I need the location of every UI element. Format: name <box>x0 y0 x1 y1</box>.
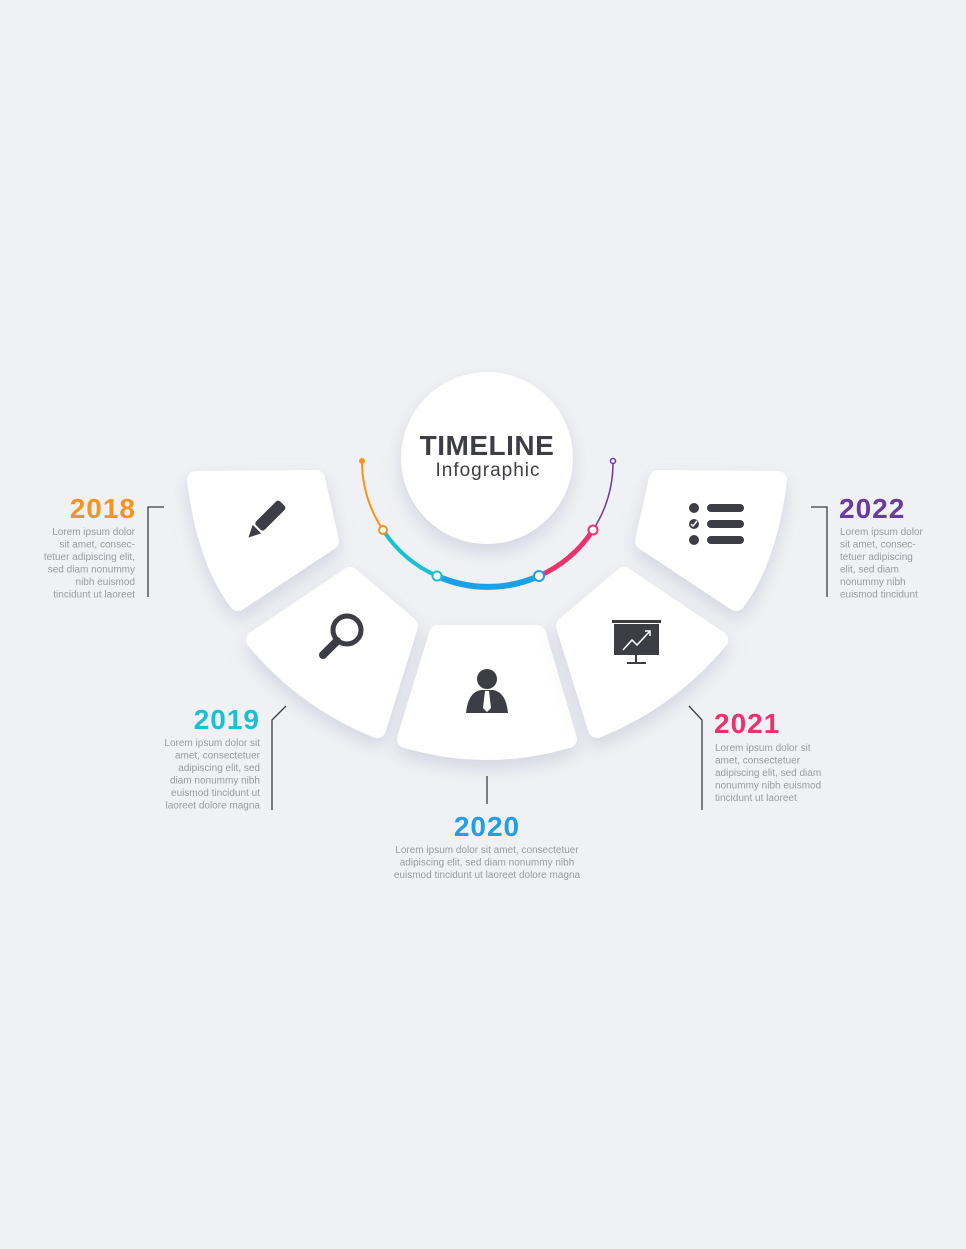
icon: person <box>466 669 508 713</box>
text: 2020: Lorem ipsum dolor sit amet, consectetuer <box>395 845 579 856</box>
icon: pencil <box>244 499 287 542</box>
panel: 2018 piece <box>196 479 330 602</box>
text: 2021: tincidunt ut laoreet <box>715 793 797 804</box>
text: 2021: nonummy nibh euismod <box>715 780 821 792</box>
panel: 2022 piece <box>644 479 778 602</box>
panel: 2020 piece <box>406 634 568 751</box>
connector lines <box>148 507 827 810</box>
text: 2021 <box>714 708 821 804</box>
icon: magnifier <box>323 616 361 655</box>
text: 2022: elit, sed diam <box>840 564 899 576</box>
text: 2018: tincidunt ut laoreet <box>53 590 135 600</box>
text: 2022: 2022 <box>839 493 905 524</box>
text: 2020 <box>394 811 581 881</box>
icon: checklist <box>689 503 744 545</box>
text: 2022: euismod tincidunt <box>840 590 918 600</box>
text: 2019: Lorem ipsum dolor sit <box>164 738 260 749</box>
text: 2019: euismod tincidunt ut <box>171 788 260 799</box>
title circle <box>401 372 573 544</box>
icon: presentation board <box>612 620 661 663</box>
text: 2022: nonummy nibh <box>840 577 906 588</box>
panel: 2019 piece <box>255 576 409 729</box>
title: TIMELINE <box>420 430 554 461</box>
text: 2018: nibh euismod <box>76 577 135 588</box>
text: 2018: Lorem ipsum dolor <box>52 527 136 538</box>
text: 2019 <box>164 704 261 812</box>
timeline arc <box>359 458 616 587</box>
panel: 2021 piece <box>565 576 719 729</box>
text: 2022: tetuer adipiscing <box>840 552 913 563</box>
text: 2021: adipiscing elit, sed diam <box>715 768 821 779</box>
text: 2021: 2021 <box>714 708 780 739</box>
text: 2018: tetuer adipiscing elit, <box>44 552 135 563</box>
text: 2019: laoreet dolore magna <box>165 800 260 812</box>
text: 2018: sit amet, consec- <box>59 540 135 550</box>
text: 2022: sit amet, consec- <box>840 540 916 550</box>
text: 2020: 2020 <box>454 811 520 842</box>
subtitle: Infographic <box>435 460 541 481</box>
text: 2019: amet, consectetuer <box>175 750 261 762</box>
text: 2022: Lorem ipsum dolor <box>840 527 923 538</box>
text: 2019: diam nonummy nibh <box>170 776 260 786</box>
text: 2020: euismod tincidunt ut laoreet dolore magna <box>394 870 581 881</box>
text: 2018 <box>44 493 136 600</box>
text: 2020: adipiscing elit, sed diam nonummy nibh <box>400 858 574 868</box>
text: 2022 <box>839 493 923 600</box>
text: 2021: amet, consectetuer <box>715 756 801 766</box>
text: 2018: sed diam nonummy <box>48 564 135 576</box>
text: 2018: 2018 <box>70 493 136 524</box>
text: 2019: 2019 <box>194 704 260 735</box>
text: 2021: Lorem ipsum dolor sit <box>715 743 811 754</box>
text: 2019: adipiscing elit, sed <box>178 763 260 774</box>
